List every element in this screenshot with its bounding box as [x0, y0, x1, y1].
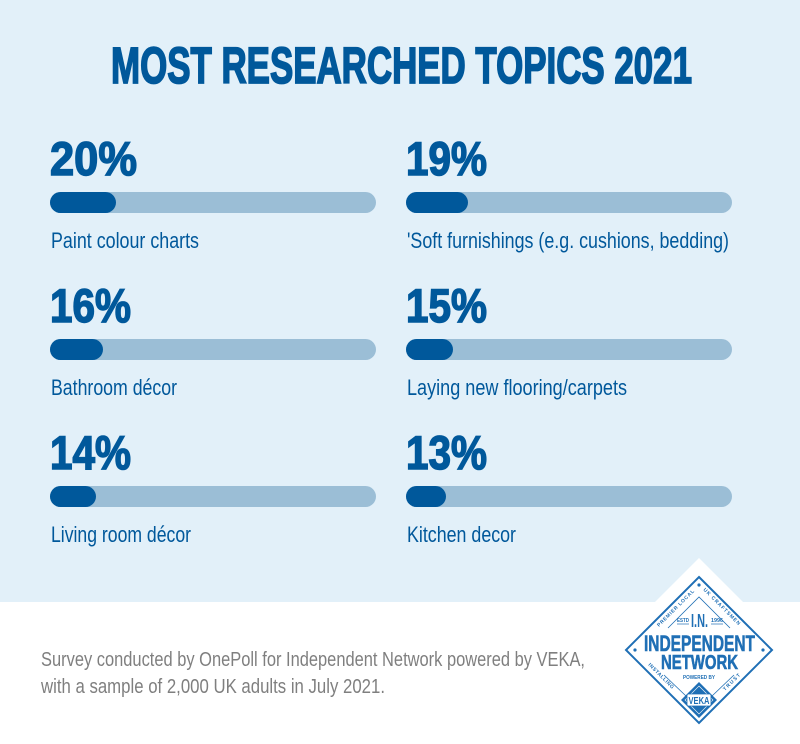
item: bathroom decor 16%: Bathroom décor	[51, 375, 177, 400]
item: laying new flooring 15%: 15%	[406, 279, 487, 332]
logo: Independent Network diamond badge	[607, 558, 791, 742]
logo: Independent Network diamond badge: POWERED BY	[683, 675, 716, 681]
item: soft furnishings 19%: 'Soft furnishings (e.g. cushions, bedding)	[407, 228, 729, 253]
item: soft furnishings 19%	[406, 132, 732, 253]
item: living room decor 14%: 14%	[50, 426, 131, 479]
footnote	[40, 649, 585, 698]
item: bathroom decor 16%	[50, 279, 376, 400]
item: paint colour charts 20%: 20%	[50, 132, 137, 185]
logo: Independent Network diamond badge: UK CRAFTSMEN	[702, 587, 741, 627]
item: paint colour charts 20%: Paint colour charts	[51, 228, 199, 253]
logo: Independent Network diamond badge: I.N.	[691, 611, 708, 631]
item: paint colour charts 20%	[50, 132, 376, 253]
logo: Independent Network diamond badge: ESTD	[677, 618, 689, 624]
item: bathroom decor 16%: 16%	[50, 279, 131, 332]
logo: Independent Network diamond badge: INDEPENDENT	[644, 631, 755, 656]
item: laying new flooring 15%: Laying new flooring/carpets	[407, 375, 627, 400]
logo: Independent Network diamond badge: INSTALLING	[647, 662, 675, 691]
item: kitchen decor 13%	[406, 426, 732, 547]
logo: Independent Network diamond badge: VEKA	[688, 696, 710, 707]
logo: Independent Network diamond badge: PREMIER LOCAL	[656, 589, 696, 628]
item: kitchen decor 13%: 13%	[406, 426, 487, 479]
item: living room decor 14%: Living room décor	[51, 522, 191, 547]
item: kitchen decor 13%: Kitchen decor	[407, 522, 516, 547]
footnote: Survey conducted by OnePoll for Independent Network powered by VEKA,	[41, 649, 585, 671]
item: laying new flooring 15%	[406, 279, 732, 400]
item: living room decor 14%	[50, 426, 376, 547]
logo: Independent Network diamond badge: NETWORK	[661, 652, 738, 674]
logo: Independent Network diamond badge: TRUST	[722, 673, 742, 692]
item: soft furnishings 19%: 19%	[406, 132, 487, 185]
footnote: with a sample of 2,000 UK adults in July 2021.	[40, 676, 385, 698]
logo: Independent Network diamond badge: 1996	[711, 618, 723, 624]
